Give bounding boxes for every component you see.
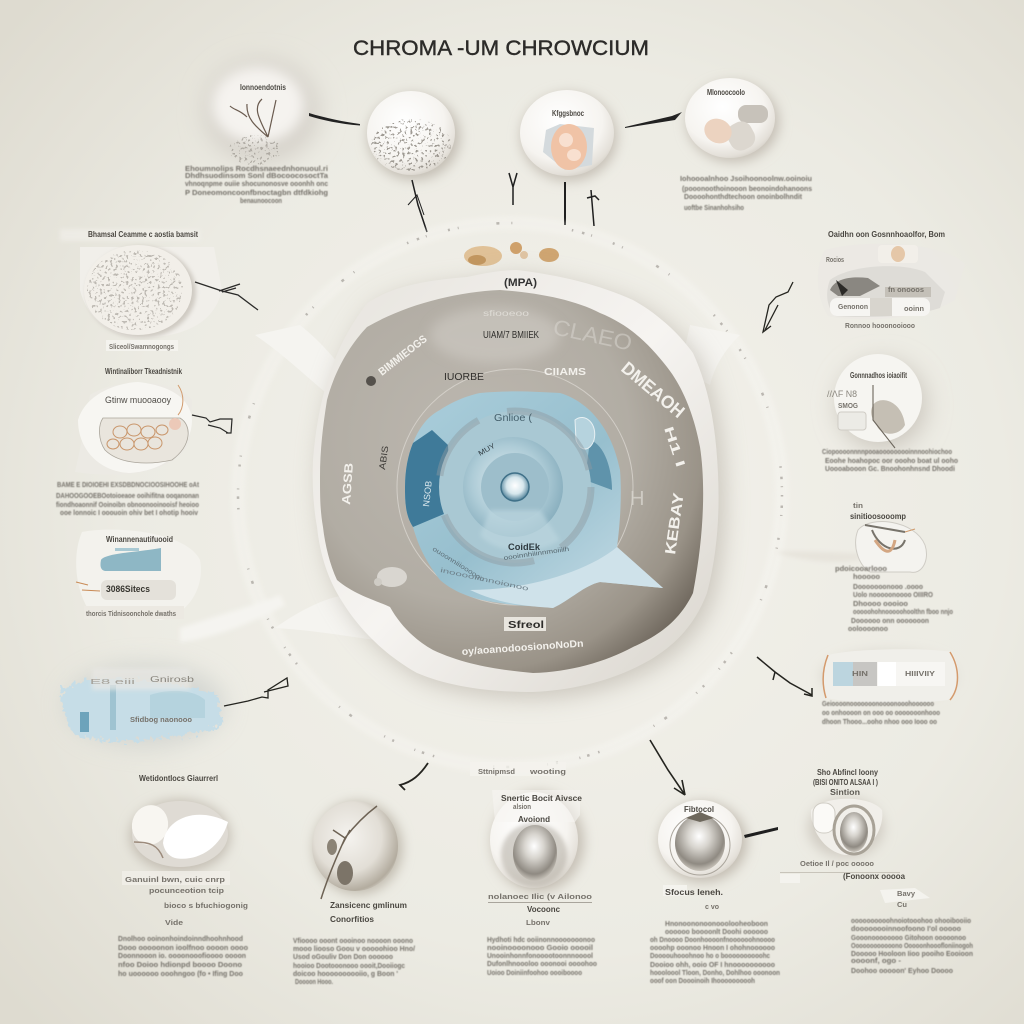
icon: pearl dome: Avoiond xyxy=(518,815,550,824)
icon: food crumbs xyxy=(464,242,559,266)
text block: oooohp ooonoo Hnoon I ohohnoooooo xyxy=(650,945,775,952)
text block: Doooon Hooo. xyxy=(295,979,333,986)
arrow xyxy=(650,740,685,795)
heading xyxy=(813,768,878,797)
labels xyxy=(780,861,930,909)
blue speech blob xyxy=(405,391,663,608)
icon: capsule device: Genonon xyxy=(838,304,868,311)
label: centre bottom: wooting xyxy=(529,769,566,776)
title: CHROMA -UM CHROWCIUM xyxy=(353,37,649,60)
captions: Ganuinl bwn, cuic cnrp xyxy=(125,877,225,884)
text block: hooooo xyxy=(853,574,880,581)
centre orb xyxy=(501,473,529,501)
heading: Snertic Bocit Aivsce xyxy=(501,794,583,803)
text block: Dooioo ohh, ooio OF I hnoooooooooo xyxy=(650,962,775,969)
text block: ooe lonnoic I ooouoin ohiv bet I ohotip hooiv xyxy=(60,510,198,517)
text block: Dnolhoo ooinonhoindoinndhoohnhood xyxy=(118,936,243,943)
inner labels: CoidEk xyxy=(508,542,541,552)
icon: blue tray: thorcis Tidnisoonchole dwaths xyxy=(86,611,176,618)
droplet xyxy=(575,417,595,449)
panel: right column xyxy=(757,230,965,726)
icon: blue textured: Gnirosb xyxy=(150,675,195,684)
ring labels xyxy=(339,277,689,658)
disc surface xyxy=(320,290,703,673)
label: centre bottom: Sttnipmsd xyxy=(478,769,515,776)
text block: oooonf, ogo - xyxy=(851,958,902,965)
label: bottom arc: oy/aoanodoosionoNoDn xyxy=(461,639,584,658)
text block: oh Dnoooo Doonhoooonfnoooooohnoooo xyxy=(650,937,775,944)
label: centre upper: IUORBE xyxy=(444,372,484,383)
arrows: down to ring xyxy=(408,173,599,232)
text block: doooooooinnoofoono I'ol ooooo xyxy=(851,926,961,933)
labels: c vo xyxy=(705,904,719,911)
labels xyxy=(663,885,723,911)
captions: Vide xyxy=(165,920,183,927)
labels: Conorfitios xyxy=(330,915,375,924)
label: left AGS: AGSB xyxy=(339,462,356,505)
heading: Bhamsal Ceamme c aostia bamsit xyxy=(88,230,198,239)
ribbon xyxy=(180,595,285,642)
icon: egg ball xyxy=(127,800,230,872)
blue centre xyxy=(405,391,663,608)
text block: Uolo nooooonoooo OIIIRO xyxy=(853,592,933,599)
text block xyxy=(487,937,597,977)
arrow xyxy=(192,415,232,433)
captions: pocunceotion tcip xyxy=(149,888,224,895)
icon: pills ball xyxy=(685,78,779,162)
text block: oooooooooohnoiotooohoo ohooibooiio xyxy=(851,918,971,925)
icon: bean ball: SMOG xyxy=(838,403,859,410)
icon: blue textured: Sfidbog naonooo xyxy=(130,717,192,724)
icon: bean ball: //ΛF N8 xyxy=(827,389,857,399)
panel: top row xyxy=(185,60,812,232)
icon: nerve ball xyxy=(204,60,320,165)
disc shadow xyxy=(319,276,725,698)
text block: Doonnooon io. oooonooofioooo oooon xyxy=(118,953,246,960)
icon: speckled ball xyxy=(367,91,460,180)
arrow xyxy=(195,282,258,310)
text block: BAME E DIOIOEHI EXSDBDNOCIOOSIHOOHE oAt xyxy=(57,482,200,489)
text block: Uoooabooon Gc. Bnoohonhnsnd Dhoodi xyxy=(825,466,955,473)
text block: hoooloool Tloon, Donho, Dohlhoo ooonoon xyxy=(650,970,780,977)
text block: top left: vhnoqnpme ouiie shocunonosve ooonhh onc xyxy=(185,181,328,188)
icon: pearl ball: Fibtocol xyxy=(684,805,714,814)
text block xyxy=(822,449,958,473)
text block: Doooouhooohnoo ho o boooooooooohc xyxy=(650,953,770,960)
icon: blue textured xyxy=(61,663,225,747)
arrow xyxy=(757,657,812,696)
text block: Uoioo Doiniinfoohoo oooiboooo xyxy=(487,970,582,977)
caption xyxy=(106,340,178,351)
heading: Sho Abfincl loony xyxy=(817,768,878,777)
text block: top right: Iohoooalnhoo Jsoihoonoolnw.ooinoiu xyxy=(680,176,812,183)
inner labels: oooinnhiiinnmoiiiih xyxy=(503,546,570,562)
icon: tube: HIN xyxy=(852,671,868,678)
inner labels: ouoonniiioooooo xyxy=(431,546,486,584)
icon: blue textured: E8 eiii xyxy=(90,679,136,686)
icon: capsule device: fn onooos xyxy=(888,287,924,294)
text block: Oooooooooooono Ooooonhooofloniinogoh xyxy=(851,943,973,950)
captions: bioco s bfuchiogonig xyxy=(164,903,248,910)
label: arc right: H1 I xyxy=(661,424,688,469)
heading xyxy=(60,229,200,241)
text block: top left: benaunoocoon xyxy=(240,198,282,205)
icon: ring device xyxy=(856,522,927,572)
inner labels: Gnlioe ( xyxy=(494,413,533,424)
text block: pdoicooarlooo xyxy=(835,566,887,573)
label: Gtinw muooaooy xyxy=(105,395,171,405)
text block: top right: uoftbe Sinanhohsiho xyxy=(684,205,744,212)
text block: ho uoooooo ooohngoo (fo • Ifing Doo xyxy=(118,971,243,978)
heading: sinitioosooomp xyxy=(850,512,906,521)
labels: Vocoonc xyxy=(527,905,561,914)
icon: capsule device: ooinn xyxy=(904,306,924,313)
text block xyxy=(851,918,973,975)
label: Ionnoendotnis xyxy=(240,83,286,92)
icon: tube: HIIIVIIY xyxy=(905,671,935,678)
label: sweet xyxy=(504,617,546,631)
text block: nooinoooonooo Gooio ooooil xyxy=(487,945,593,952)
inner labels: MUY xyxy=(478,442,497,458)
text block: Hydhoti hdc ooiinonnooooooonoo xyxy=(487,937,595,944)
text block: DAHOOGOOEBOotoioeaoe ooihifitna ooqanonan xyxy=(56,493,199,500)
text block: top right xyxy=(680,176,812,212)
icon: branch ball xyxy=(312,801,402,899)
text block: fiondhoaonnif Ooinoibn obnoonooinooisf heoioo xyxy=(56,502,199,509)
text block: Geioooonooooooonoooonooohoooooo xyxy=(822,701,934,708)
text block: ooof oon Doooinoih Ihoooooooooh xyxy=(650,978,755,985)
label: big arc: CLAEO xyxy=(551,314,634,356)
ribbon xyxy=(775,551,860,562)
inner thin ring xyxy=(397,369,633,605)
icon: pearl dome: alsion xyxy=(513,804,531,811)
text block: top right: (pooonoothoinooon beonoindohanoons xyxy=(682,186,812,193)
label: Mlonoocoolo xyxy=(707,88,745,97)
label: arc bold: DMEAOH xyxy=(617,358,689,422)
text block: Dooooooonooo .oooo xyxy=(853,584,923,591)
label: left mini: ABIS xyxy=(377,445,390,470)
text block: Gooonoooooooo Gitohoon ooooonoo xyxy=(851,935,966,942)
text block: ooloooonoo xyxy=(848,626,888,633)
text block: top right: Doooohonthdtechoon onoinbolhndit xyxy=(684,194,803,201)
text block xyxy=(118,936,248,978)
text block xyxy=(293,938,415,986)
arrow xyxy=(744,827,778,838)
label: H L: H xyxy=(630,488,644,510)
text: small: tin xyxy=(853,503,863,510)
text block: Doohoo ooooon' Eyhoo Doooo xyxy=(851,968,953,975)
ribbons xyxy=(255,325,740,640)
dark left sector xyxy=(405,430,451,527)
heading: (BISI ONITO ALSAA I ) xyxy=(813,778,878,787)
text block: Eoohe hoahopoc oor oooho boat ul ooho xyxy=(825,458,958,465)
icon: bean ball xyxy=(827,354,926,449)
heading: Winannenautifuooid xyxy=(106,535,173,544)
caption: Sliceol/Swamnogongs xyxy=(109,344,174,351)
disc rim xyxy=(313,270,719,692)
caption xyxy=(84,606,184,619)
text block xyxy=(650,921,780,985)
text block: Ciopoooonnnnpooaooooooooinnnoohiochoo xyxy=(822,449,952,456)
text block: top left xyxy=(185,166,328,205)
inner labels: inooooiiinnoionoo xyxy=(440,567,530,593)
label: right vertical: KEBAY xyxy=(662,492,688,556)
icon: ring ball xyxy=(808,798,884,858)
label: unit: UIAM/7 BMIIEK xyxy=(483,330,539,341)
label: MPA: (MPA) xyxy=(504,277,537,289)
text block: Unooinhonnfonooootoonnnooool xyxy=(487,953,593,960)
blue tail xyxy=(470,547,663,608)
text block: hooioo Dootooonooo oooit,Dooiiogc xyxy=(293,963,405,970)
labels xyxy=(330,901,407,924)
text block: ooooohohnooooohoolthn fboo nnjo xyxy=(853,609,953,616)
icon: speckle cell xyxy=(80,245,222,338)
label: grey small: sfiooeoo xyxy=(483,309,530,318)
labels: Oetioe Il / poc ooooo xyxy=(800,861,874,868)
icon: capsule device xyxy=(818,244,965,319)
highlight xyxy=(430,307,560,363)
labels: Lbonv xyxy=(526,920,550,927)
text block: Usod oGouliv Don Don oooooo xyxy=(293,954,393,961)
label: left arc: BIMMIEOGS xyxy=(376,333,430,378)
text block xyxy=(835,566,953,633)
arrow xyxy=(309,113,360,126)
text block xyxy=(56,482,200,517)
label: centre bottom xyxy=(470,762,566,776)
arrow xyxy=(763,282,793,332)
heading: Wetidontlocs Giaurrerl xyxy=(139,774,218,783)
icon: pearl ball xyxy=(658,800,747,882)
inner labels xyxy=(421,413,570,593)
dark right sector xyxy=(585,440,612,490)
text block: Hnonoononoonooolooheoboon xyxy=(665,921,768,928)
label: sweet: Sfreol xyxy=(508,620,544,631)
labels: Zansicenc gmlinum xyxy=(330,901,407,910)
icon: small drops xyxy=(366,376,407,587)
arrow xyxy=(224,678,288,706)
arrow xyxy=(400,763,428,790)
heading: Oaidhn oon Gosnnhoaolfor, Bom xyxy=(828,230,945,239)
decorative ring of marks xyxy=(238,223,782,767)
text block: top left: P Doneomoncoonfbnoctagbn dtfdkiohg xyxy=(185,190,328,197)
labels: Bavy xyxy=(897,891,915,898)
icon: tube xyxy=(820,649,958,704)
icon: pearl dome xyxy=(490,790,584,892)
labels: Rocios xyxy=(826,257,844,264)
text block: oooooo boooonlt Doohi oooooo xyxy=(665,929,768,936)
inner labels: NSOB xyxy=(421,480,434,507)
text block: dhoon Thooo...ooho nhoo ooo Iooo oo xyxy=(822,719,937,726)
heading: Sintion xyxy=(830,788,860,797)
text block: mooo liooso Goou v ooooohioo Hno/ xyxy=(293,946,415,953)
labels: Sfocus Ieneh. xyxy=(665,888,723,897)
text block: oo onhoooon on ooo oo ooooooonhooo xyxy=(822,710,940,717)
text block: top left: Ehoumnolips Rocdhsnaeednhonuoul.ri xyxy=(185,166,328,173)
text block: Doooooo onn ooooooon xyxy=(851,618,929,625)
label: Kfggsbnoc xyxy=(552,109,584,118)
labels: nolanoec Ilic (v Ailonoo xyxy=(488,894,592,901)
text block: doicoo hoooooooooiio, g Boon ' xyxy=(293,971,398,978)
text block: nfoo Doioo hdionpd boooo Doono xyxy=(118,962,242,969)
concentric rings xyxy=(439,411,591,563)
icon: crystal ball xyxy=(520,90,617,181)
caption: Ronnoo hooonooiooo xyxy=(845,323,915,330)
label: 3086Sitecs xyxy=(106,584,150,594)
text block: top left: Dhdhsuodinsom Sonl dBocoocosoctTa xyxy=(185,173,328,180)
panel: left column xyxy=(56,229,288,747)
text block: Vfioooo ooont oooinoo noooon ooono xyxy=(293,938,413,945)
heading: Wintinaliborr Tkeadnistnik xyxy=(105,367,182,376)
text block: Dufonlhnoooloo ooonooi oooohoo xyxy=(487,961,597,968)
labels: (Fonoonx ooooa xyxy=(843,872,906,881)
panel: central disc xyxy=(255,270,740,698)
captions xyxy=(122,871,248,927)
label: centre right: CIIAMS xyxy=(544,367,586,378)
labels: Cu xyxy=(897,902,907,909)
text block: Dhoooo oooioo xyxy=(853,601,908,608)
text block: Dooooo Hooloon Iioo pooiho Eooioon xyxy=(851,951,973,958)
icon: cell dish xyxy=(75,382,192,475)
heading: Gonnnadhos ioiaoifit xyxy=(850,371,907,380)
text block: Dooo ooooonon ioolfnoo oooon oooo xyxy=(118,945,248,952)
text block xyxy=(822,701,940,726)
panel: bottom row xyxy=(118,740,973,986)
labels xyxy=(488,894,592,927)
icon: blue tray xyxy=(76,530,201,620)
arrow xyxy=(625,112,682,128)
